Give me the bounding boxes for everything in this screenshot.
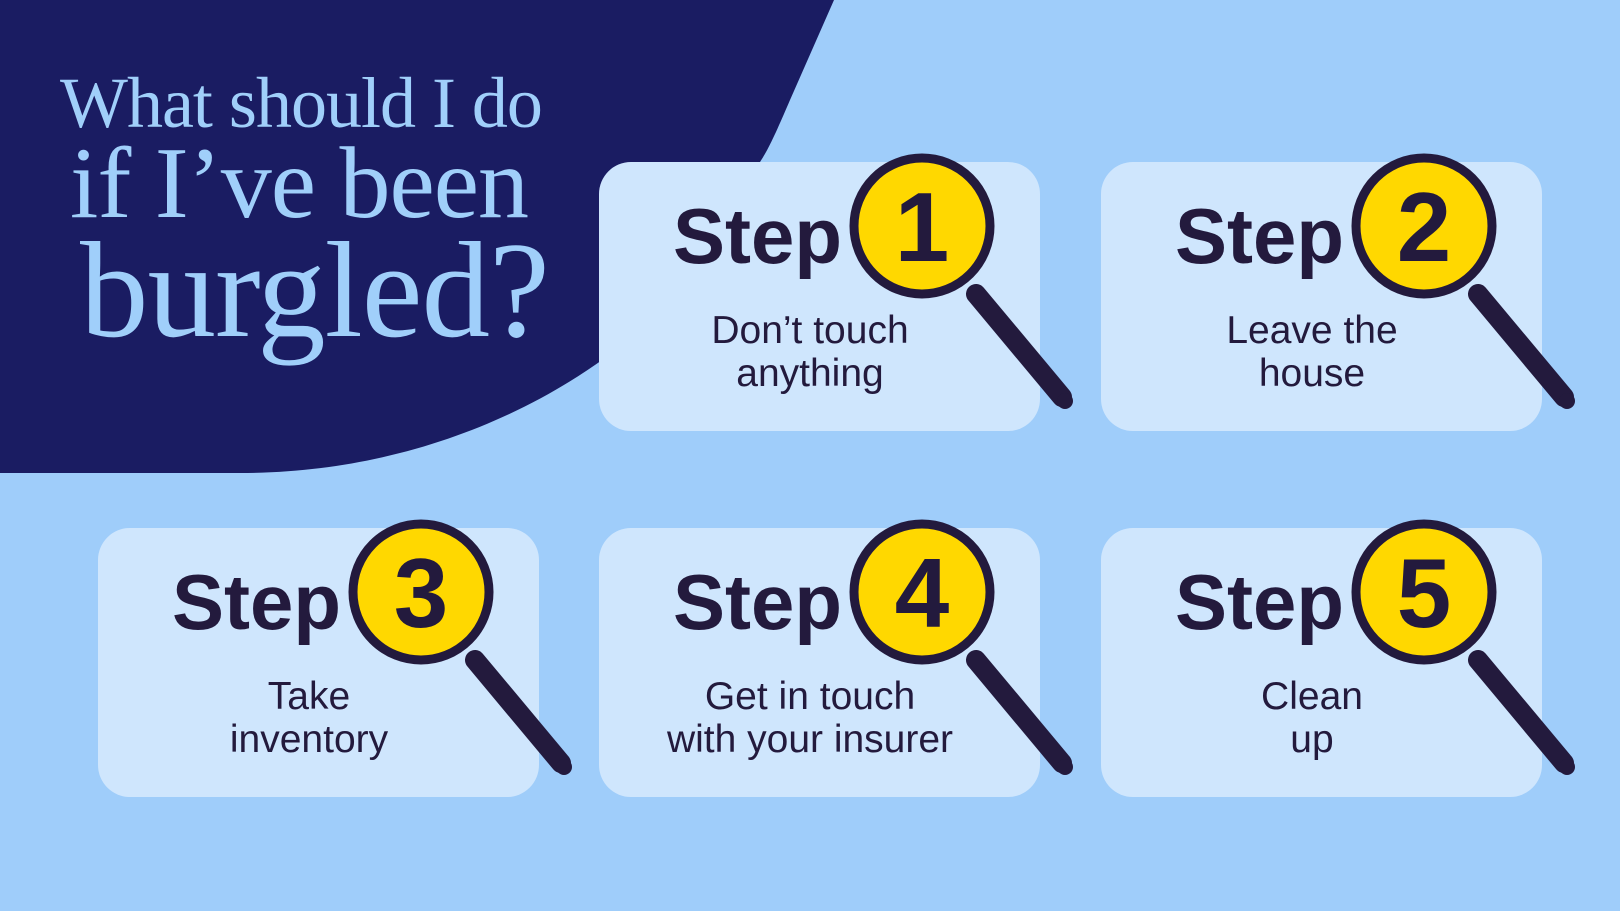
description: Clean	[1261, 675, 1363, 718]
description: up	[1290, 718, 1334, 761]
icon: magnifier 2	[1356, 158, 1575, 409]
card: step 1	[599, 158, 1073, 431]
description: with your insurer	[666, 718, 953, 761]
description: house	[1259, 352, 1365, 395]
icon: magnifier 1	[854, 158, 1073, 409]
description: Get in touch	[705, 675, 915, 718]
icon: magnifier 4: 4	[895, 538, 949, 648]
title: if I’ve been	[70, 127, 528, 240]
icon: magnifier 5	[1356, 524, 1575, 775]
title background shape	[0, 0, 834, 473]
description: Take	[268, 675, 350, 718]
title: burgled?	[80, 214, 549, 366]
description: anything	[736, 352, 884, 395]
step label: Step	[673, 192, 842, 280]
description: Don’t touch	[711, 309, 909, 352]
icon: magnifier 1: 1	[895, 172, 949, 282]
card: step 3	[98, 524, 572, 797]
description: Leave the	[1226, 309, 1398, 352]
description: inventory	[230, 718, 389, 761]
icon: magnifier 3	[353, 524, 572, 775]
step label: Step	[673, 558, 842, 646]
icon: magnifier 3: 3	[394, 538, 448, 648]
card: step 4	[599, 524, 1073, 797]
card: step 2	[1101, 158, 1575, 431]
step label: Step	[1175, 558, 1344, 646]
icon: magnifier 2: 2	[1397, 172, 1451, 282]
title: What should I do	[60, 63, 542, 143]
step label: Step	[1175, 192, 1344, 280]
icon: magnifier 4	[854, 524, 1073, 775]
icon: magnifier 5: 5	[1397, 538, 1451, 648]
title	[60, 63, 549, 366]
card: step 5	[1101, 524, 1575, 797]
step label: Step	[172, 558, 341, 646]
